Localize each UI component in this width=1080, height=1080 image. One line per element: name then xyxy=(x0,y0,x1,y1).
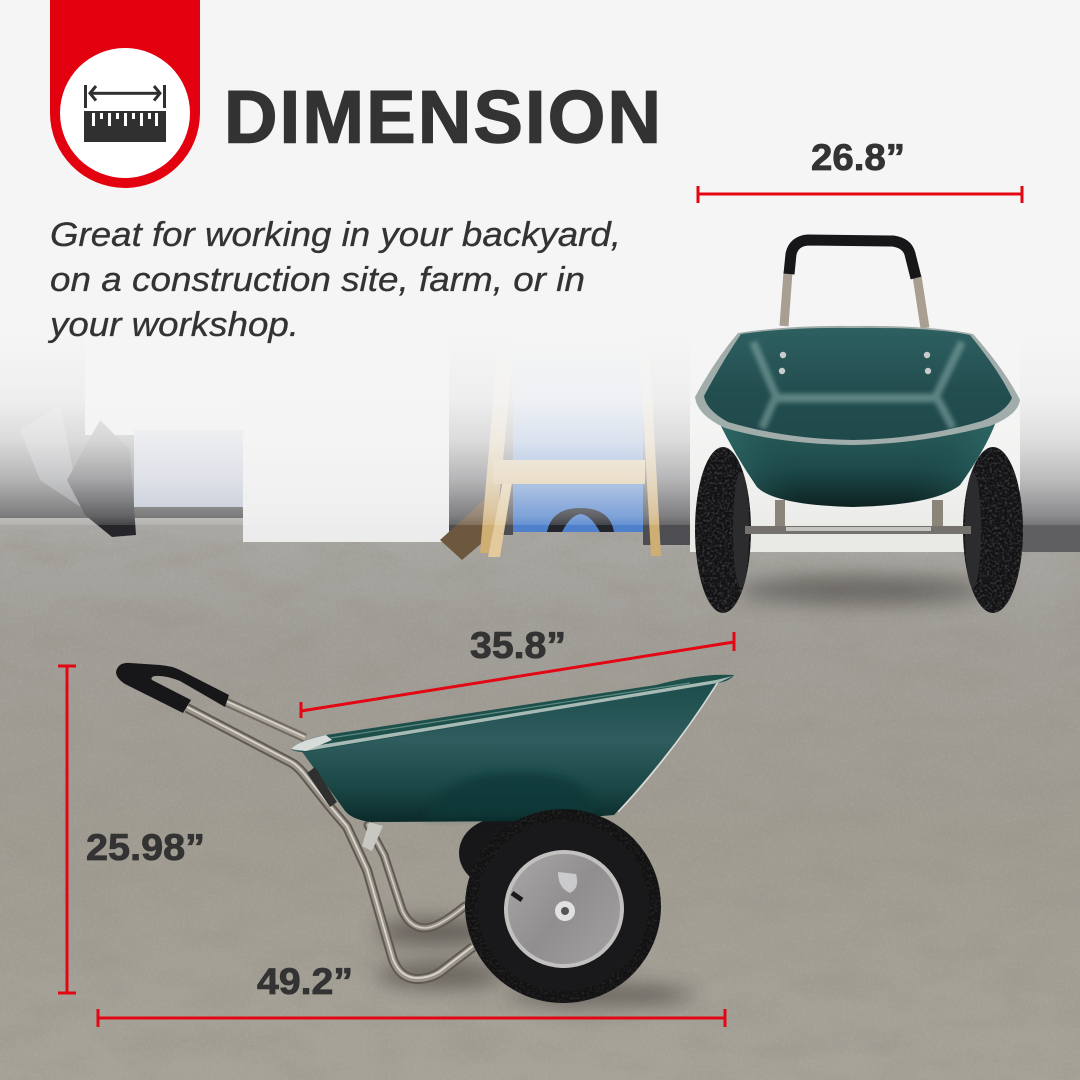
dimension: width 26.8: 26.8” xyxy=(811,137,905,178)
description text xyxy=(48,216,621,344)
description text: Great for working in your backyard, xyxy=(50,216,621,254)
interior highlights xyxy=(753,342,962,428)
ground shadows xyxy=(375,920,495,944)
left wheel xyxy=(695,447,751,613)
dimension: width 26.8 xyxy=(698,137,1022,203)
bucket body xyxy=(300,680,720,822)
front frame and handle tube xyxy=(187,707,473,979)
description text: your workshop. xyxy=(48,306,299,344)
bracket xyxy=(307,767,337,807)
badge: red tab with ruler icon xyxy=(50,0,200,188)
dimension: overall length 49.2: 49.2” xyxy=(257,961,353,1002)
front view wheelbarrow xyxy=(695,240,1023,613)
description text: on a construction site, farm, or in xyxy=(50,261,585,299)
icon: ruler with width arrow xyxy=(84,85,166,142)
dimension: bucket length 35.8: 35.8” xyxy=(470,625,566,666)
dimension: bucket length 35.8 xyxy=(301,625,734,718)
bucket interior xyxy=(704,328,1012,440)
dimension: height 25.98: 25.98” xyxy=(86,827,205,868)
bucket outer xyxy=(718,420,995,507)
handle grip xyxy=(116,663,229,713)
bolts xyxy=(779,352,931,374)
front wheel xyxy=(465,809,661,1003)
bucket rim xyxy=(695,326,1020,445)
dimension: overall length 49.2 xyxy=(98,961,725,1027)
bucket rim xyxy=(291,675,734,752)
dimension: height 25.98 xyxy=(58,666,205,993)
axle and struts xyxy=(745,500,971,534)
right wheel xyxy=(963,447,1023,613)
shadow xyxy=(735,576,985,604)
title: DIMENSION xyxy=(224,76,661,158)
handle grip xyxy=(789,240,916,278)
back frame tube xyxy=(368,825,465,928)
side view wheelbarrow xyxy=(116,663,734,1005)
back wheel xyxy=(459,818,541,888)
handle tubes xyxy=(784,272,788,326)
upper handle tube xyxy=(226,701,305,738)
